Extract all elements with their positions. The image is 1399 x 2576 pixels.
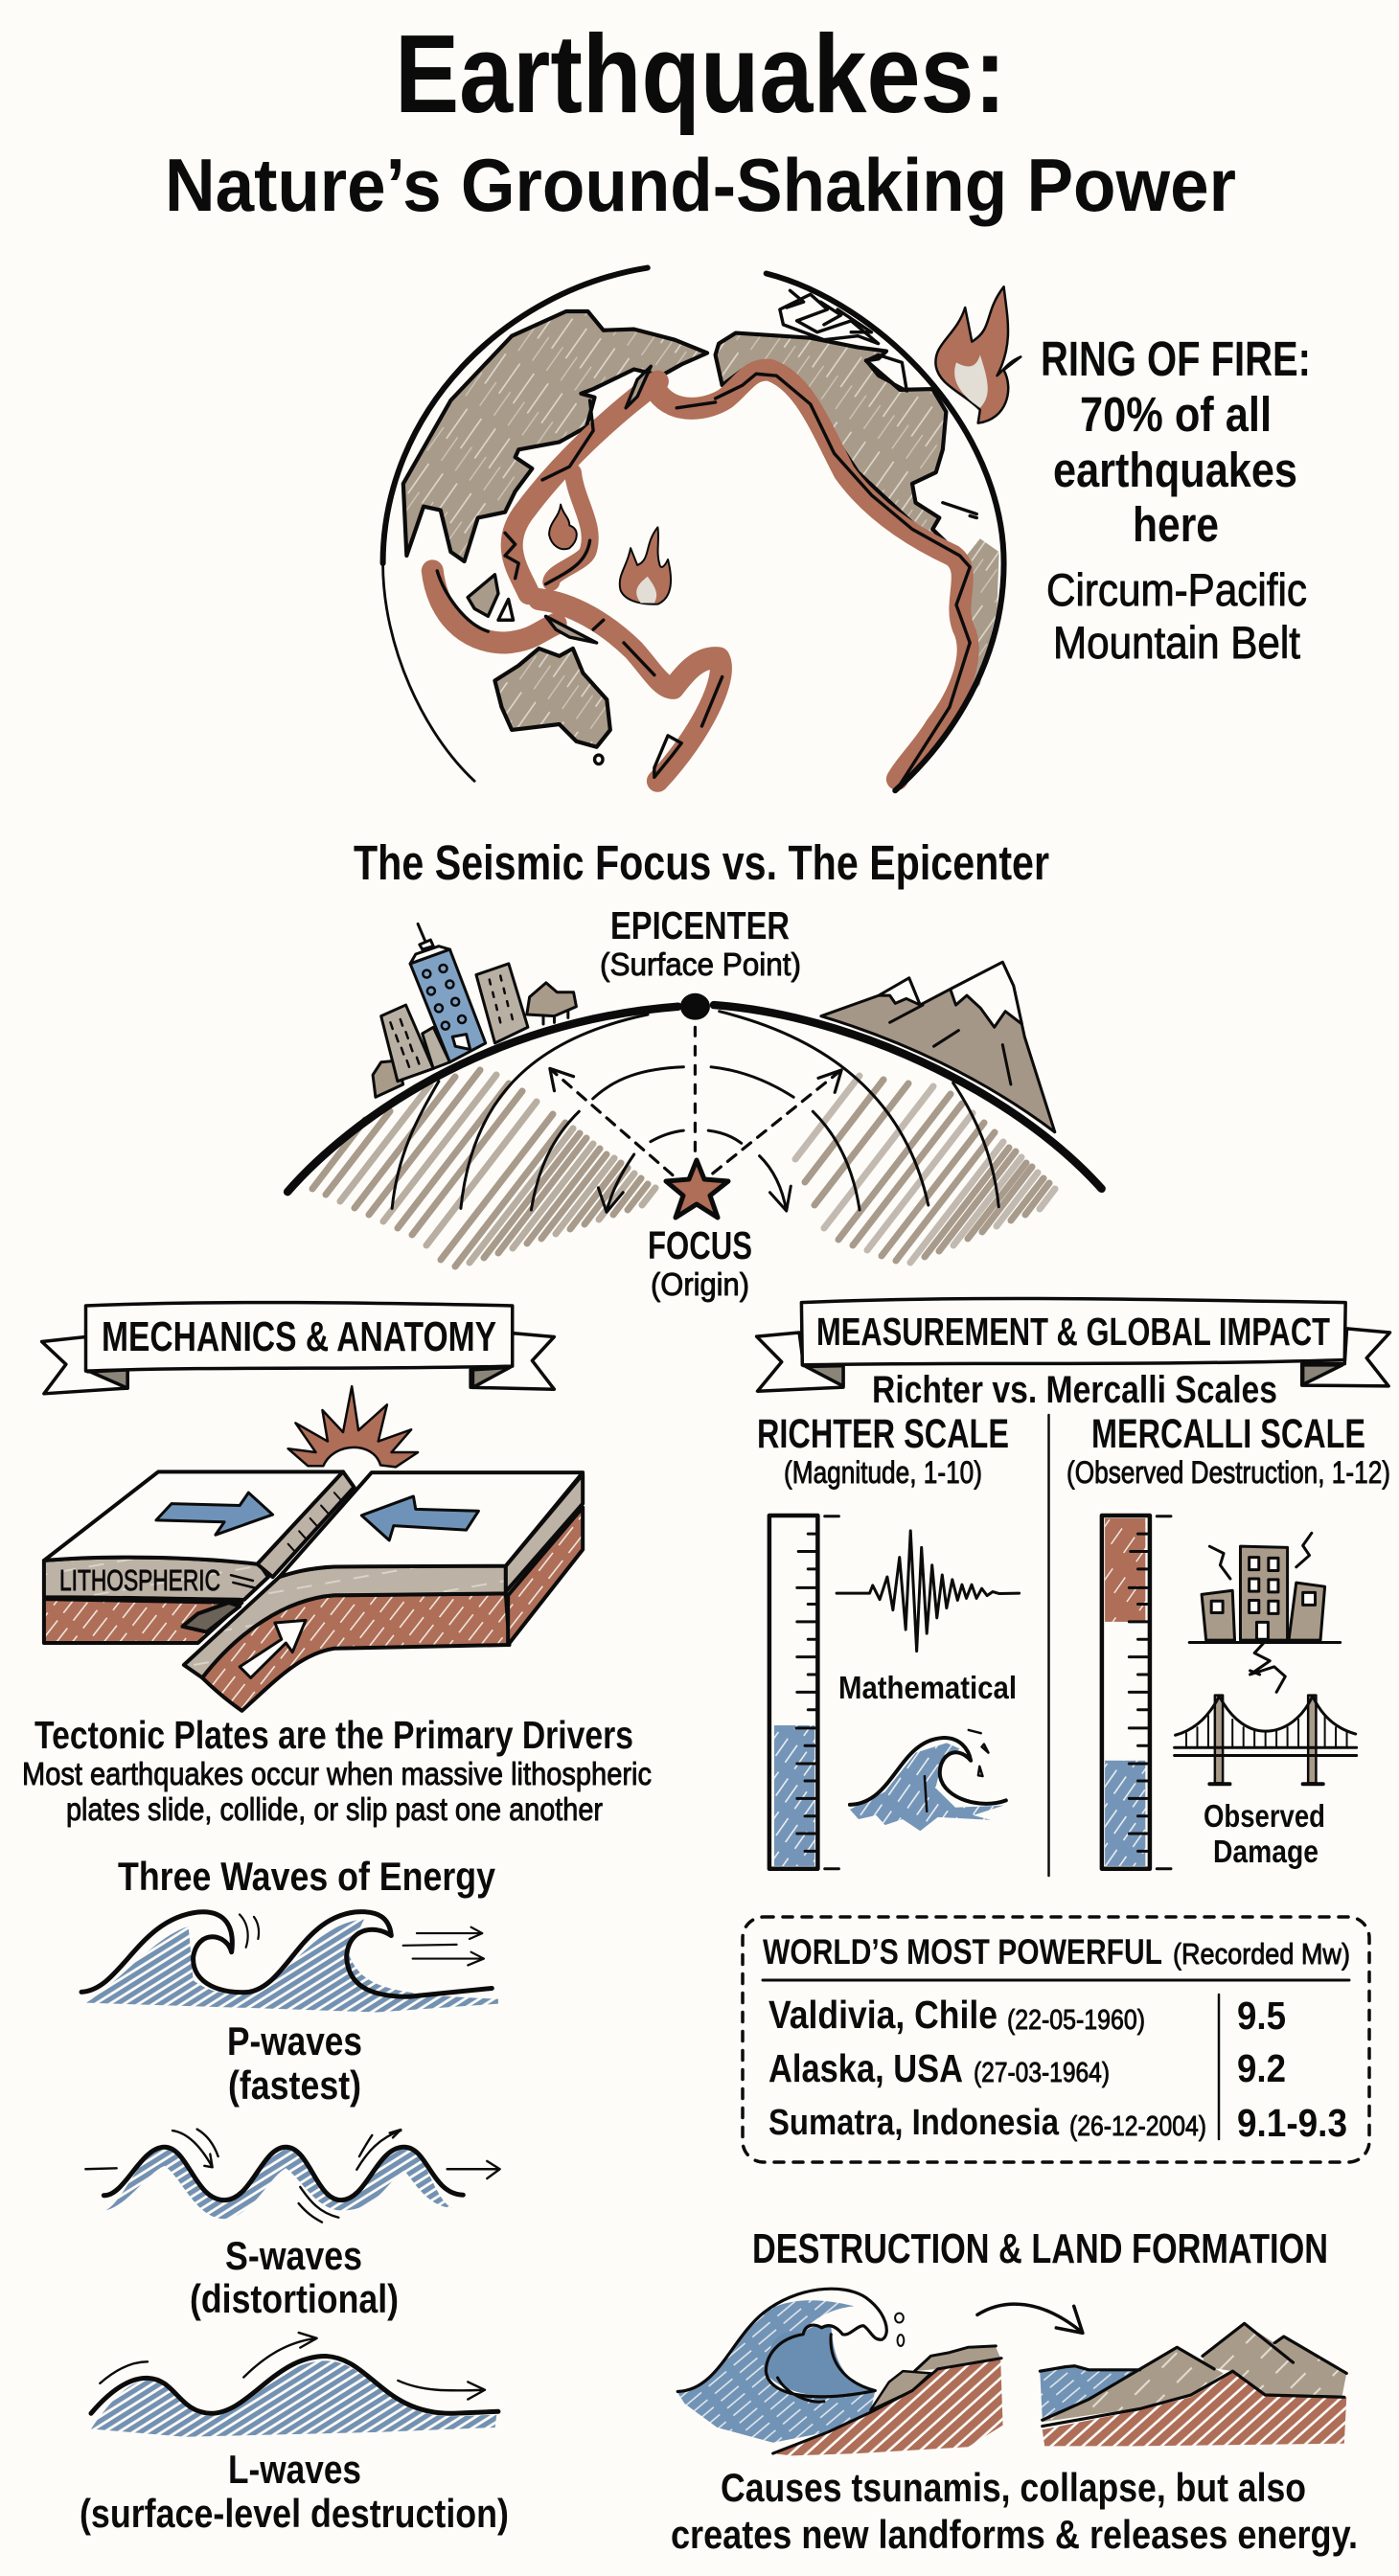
focus star [666, 1160, 728, 1218]
label: focus: (Origin) [651, 1266, 749, 1302]
Ring of Fire text: 70% of all [1080, 387, 1272, 442]
right plate [184, 1472, 583, 1711]
wave: S-waves: S-waves [225, 2233, 362, 2278]
epicenter point [680, 993, 710, 1020]
Mercalli bar gauge [1102, 1516, 1171, 1869]
dashed box [743, 1917, 1369, 2162]
label: observed damage: Damage [1213, 1834, 1319, 1869]
text: tectonic plates [22, 1713, 652, 1827]
column: Mercalli scale [1066, 1411, 1390, 1869]
row: Sumatra: (26-12-2004) [1069, 2111, 1206, 2142]
text: tectonic plates: Most earthquakes occur when massive lithospheric [22, 1756, 652, 1791]
heading: three waves: Three Waves of Energy [118, 1854, 496, 1899]
icon: ocean wave [850, 1730, 1006, 1831]
Ring of Fire text: RING OF FIRE: [1041, 331, 1311, 386]
icon: small flame two [620, 527, 671, 604]
text: destruction caption [671, 2465, 1358, 2557]
title: Earthquakes: [395, 11, 1006, 136]
land: North America [716, 333, 960, 556]
label: epicenter: EPICENTER [610, 903, 790, 947]
left plate [44, 1471, 354, 1643]
section heading: The Seismic Focus vs. The Epicenter [354, 835, 1049, 890]
row: Sumatra: 9.1-9.3 [1237, 2101, 1347, 2145]
label: mathematical: Mathematical [838, 1670, 1017, 1705]
text: tectonic plates: Tectonic Plates are the Primary Drivers [34, 1713, 633, 1757]
icon: city buildings [373, 923, 576, 1097]
icon: mountains [821, 962, 1055, 1132]
row: Sumatra [768, 2101, 1347, 2145]
wave: L-waves: L-waves [228, 2447, 361, 2492]
label: observed damage: Observed [1204, 1798, 1325, 1834]
hatched crust [312, 1070, 1055, 1266]
label: observed damage [1204, 1798, 1325, 1869]
label: focus: FOCUS [648, 1223, 752, 1267]
scale divider [1047, 1415, 1050, 1876]
wave: P-waves: P-waves [227, 2018, 362, 2063]
row: Valdivia [768, 1993, 1286, 2038]
panel: mechanics and anatomy [22, 1303, 652, 2536]
title block [165, 11, 1236, 227]
globe outline [383, 268, 1004, 790]
label: lithospheric: LITHOSPHERIC [59, 1563, 220, 1597]
row: Alaska: (27-03-1964) [974, 2058, 1110, 2088]
land: Asia [403, 311, 707, 561]
seismic wave fronts [392, 1012, 998, 1212]
arrow: plate motion left [361, 1496, 478, 1540]
row: Valdivia: 9.5 [1237, 1994, 1286, 2038]
globe map [383, 268, 1021, 790]
icon: suspension bridge [1175, 1696, 1357, 1784]
wave: L-waves [80, 2333, 509, 2536]
coast and fault lines [437, 290, 976, 786]
label: epicenter [600, 903, 801, 982]
panel: seismic focus vs epicenter [287, 835, 1102, 1302]
plate boundary diagram [44, 1386, 583, 1711]
panel: measurement and global impact [671, 1298, 1390, 2557]
icon: damaged buildings [1189, 1533, 1341, 1692]
wave: L-waves: (surface-level destruction) [80, 2491, 509, 2536]
text: tectonic plates: plates slide, collide, or slip past one another [66, 1791, 603, 1827]
land: South America [899, 538, 999, 786]
wave: S-waves: (distortional) [190, 2276, 399, 2321]
row: Alaska [768, 2046, 1286, 2090]
Ring of Fire band [432, 370, 968, 781]
row: Valdivia: Valdivia, Chile [768, 1993, 998, 2037]
icon: large flame [935, 286, 1021, 423]
Ring of Fire text: earthquakes [1053, 443, 1297, 497]
row: Alaska: 9.2 [1237, 2046, 1286, 2090]
column: Richter scale [757, 1411, 1020, 1869]
banner: mechanics and anatomy [42, 1303, 554, 1394]
column: Richter scale: RICHTER SCALE [757, 1411, 1009, 1457]
arrow: transformation [977, 2304, 1083, 2333]
Ring of Fire text: here [1133, 497, 1219, 552]
illustration: new landforms [1040, 2323, 1346, 2446]
Ring of Fire text [1041, 331, 1311, 668]
collision burst [288, 1386, 418, 1467]
cross-section diagram [287, 923, 1102, 1212]
label: epicenter: (Surface Point) [600, 946, 801, 982]
icon: small flame one [549, 505, 577, 549]
illustration: tsunami on coast [677, 2289, 1003, 2455]
text: destruction caption: Causes tsunamis, collapse, but also [721, 2465, 1306, 2510]
table heading: WORLD’S MOST POWERFUL [763, 1932, 1162, 1972]
wave: S-waves [85, 2130, 500, 2321]
heading: Richter vs Mercalli: Richter vs. Mercalli Scales [872, 1369, 1277, 1411]
land: Australia [494, 649, 610, 747]
row: Sumatra: Sumatra, Indonesia [768, 2103, 1060, 2143]
dashed ray arrows [550, 1027, 841, 1175]
arrow: plate motion right [156, 1493, 273, 1535]
column: Richter scale: (Magnitude, 1-10) [784, 1455, 982, 1490]
wave: P-waves: (fastest) [228, 2063, 361, 2108]
Ring of Fire text: Mountain Belt [1053, 617, 1300, 668]
wave: P-waves [81, 1912, 498, 2108]
banner: measurement and global impact [757, 1298, 1390, 1391]
row: Valdivia: (22-05-1960) [1007, 2005, 1145, 2036]
icon: seismograph trace [837, 1531, 1020, 1652]
panel: ring of fire globe [383, 268, 1311, 790]
Richter bar gauge [769, 1516, 838, 1869]
ground surface line [287, 1005, 1102, 1192]
row: Alaska: Alaska, USA [768, 2046, 963, 2090]
banner: mechanics and anatomy: MECHANICS & ANATOMY [102, 1313, 496, 1360]
Ring of Fire text: Circum-Pacific [1046, 564, 1307, 615]
subtitle: Nature’s Ground-Shaking Power [165, 143, 1236, 227]
table: world's most powerful [743, 1917, 1369, 2162]
arrow: subduction [240, 1620, 306, 1677]
table heading: (Recorded Mw) [1173, 1937, 1350, 1971]
panel: destruction and land formation [671, 2225, 1358, 2557]
label: focus [648, 1223, 752, 1302]
